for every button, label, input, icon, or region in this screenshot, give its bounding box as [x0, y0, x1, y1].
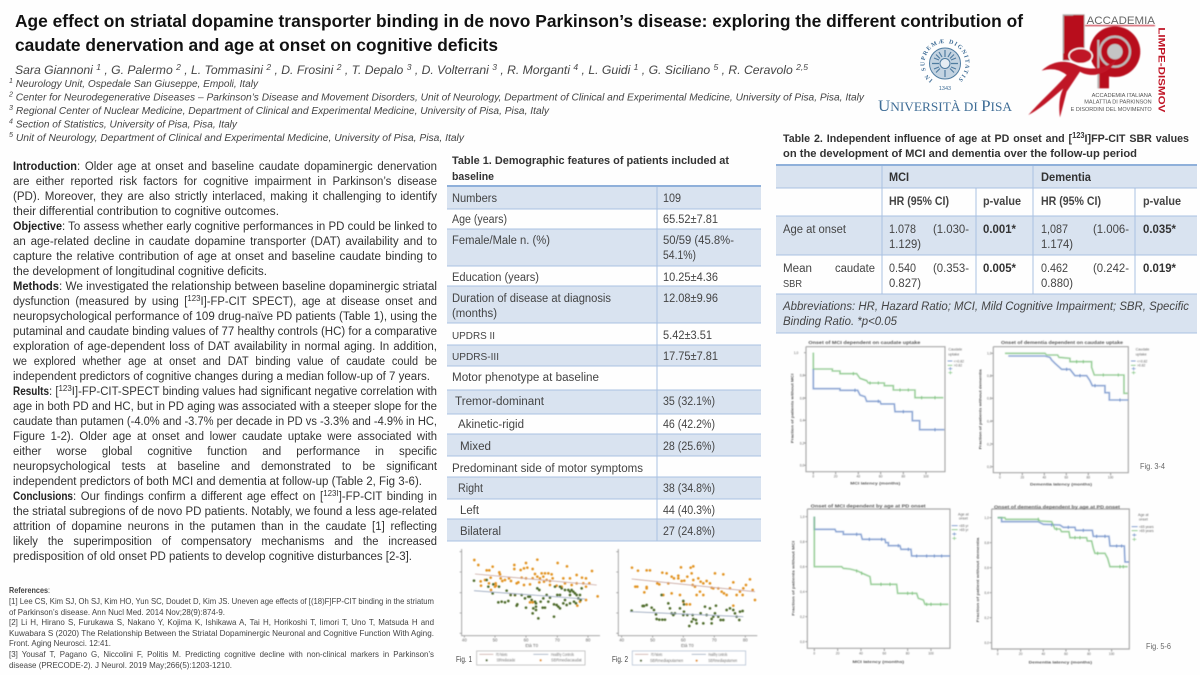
axis labels: 0,8 [800, 540, 805, 544]
legend: Healthy Controls [551, 652, 574, 657]
logo: Università di Pisa [878, 39, 1012, 115]
axis labels: 0,2 [800, 615, 805, 619]
objective: : To assess whether early cognitive performances in PD could be linked to [62, 221, 437, 233]
table 1 labels: Left [460, 505, 480, 517]
table 2 row: age at onset: (1.006- [1093, 224, 1129, 236]
axis labels: 100 [923, 474, 929, 478]
label: Fig. 2: Fig. 2 [612, 654, 628, 664]
legend: SBRmediacaudat [497, 658, 515, 663]
axis labels: 100 [1108, 475, 1114, 479]
axis labels: MCI latency (months) [852, 659, 905, 664]
figure 2: putamen scatter plot [616, 549, 757, 665]
results: either worse global cognitive function and performance in specific [13, 446, 437, 458]
axis labels: 0,4 [800, 590, 805, 594]
table 2 row: mean caudate SBR: caudate [835, 263, 875, 275]
table 1 labels: Right [458, 483, 484, 495]
blue curve [814, 517, 950, 558]
references: References: [9, 585, 50, 595]
legend: >0.82 [1137, 364, 1146, 368]
axis labels: 0,0 [800, 640, 805, 644]
axis labels: 80 [906, 651, 910, 655]
table 2 headers: HR (95% CI) [1041, 196, 1101, 208]
axis labels: 1,0 [987, 352, 992, 356]
table 1 labels: (months) [452, 308, 497, 320]
objective [13, 221, 437, 278]
methods: putaminal and caudate binding values of 77 healthy controls (HC) for a comparative [13, 326, 437, 338]
green curve [998, 518, 1128, 568]
table 2 row: mean caudate SBR: Mean [783, 263, 812, 275]
legend: PD Patients [496, 652, 507, 657]
axis labels: 20 [834, 474, 838, 478]
axis labels: 100 [928, 651, 934, 655]
axis labels: 60 [1064, 475, 1068, 479]
references: of Parkinson’s disease. Ann Nucl Med. 2014 Nov;28(9):874-9. [9, 607, 225, 617]
table 2 row: mean caudate SBR: 0.827) [889, 278, 921, 290]
chart frame [804, 347, 945, 474]
affiliations: 3 Regional Center of Nuclear Medicine, Department of Clinical and Experimental Medicine, University of Pisa, Pisa, Italy [9, 105, 550, 117]
label: Fig. 1: Fig. 1 [456, 654, 472, 664]
table 2 row: age at onset [783, 224, 1177, 251]
methods: we explored whether age at onset and DAT binding value of caudate could be [12, 356, 437, 368]
conclusions: likely the superimposition of compensatory mechanisms and the increased [13, 536, 437, 548]
legend [477, 651, 585, 665]
table 1 labels: Female/Male n. (%) [452, 235, 550, 247]
chart: MCI by caudate uptake [791, 340, 964, 486]
table 2 row: mean caudate SBR: (0.353- [933, 263, 969, 275]
axis labels: 0,6 [800, 396, 804, 400]
table 2 headers: MCI [889, 172, 909, 184]
trend lines [632, 579, 755, 592]
table 2 headers: HR (95% CI) [889, 196, 949, 208]
axis labels: 0,2 [800, 441, 804, 445]
axis labels [979, 352, 1114, 487]
axis labels: 80 [1086, 475, 1090, 479]
axis labels: 0,4 [800, 419, 804, 423]
axis labels: 40 [1041, 652, 1045, 656]
table 2 headers [889, 172, 1181, 208]
legend: >65 years [1139, 529, 1154, 533]
table 1 values: 109 [663, 193, 681, 205]
chart frame [805, 509, 950, 651]
axis labels: 80 [901, 474, 905, 478]
legend: SBRmediaputamen [708, 658, 738, 663]
introduction: their differential contribution to cognitive outcomes. [13, 206, 279, 218]
chart frame [990, 509, 1129, 652]
green points [632, 595, 743, 626]
table 1 values: 12.08±9.96 [663, 293, 718, 305]
axis labels: 0,0 [800, 464, 804, 468]
legend: >0.82 [954, 364, 962, 368]
table 1 values: 38 (34.8%) [663, 483, 715, 495]
methods: : We investigated the relationship between baseline dopaminergic striatal [59, 281, 437, 293]
axis labels: 80 [1087, 652, 1091, 656]
axis labels: 0 [999, 475, 1001, 479]
table 1 labels: Motor phenotype at baseline [452, 372, 599, 384]
axis labels [791, 351, 929, 486]
axis labels: 40 [619, 638, 625, 643]
references [9, 585, 434, 670]
table 2 row: age at onset: 1.129) [889, 239, 921, 251]
axis labels: 60 [524, 638, 529, 643]
survival bands [814, 517, 950, 604]
axis labels: 0,8 [984, 541, 989, 545]
logo mark [1028, 15, 1155, 117]
legend: onset [959, 517, 968, 521]
table 1 labels: Numbers [452, 193, 497, 205]
conclusions: attrition of dopamine neurons in the putamen than in the caudate [1] reflecting [13, 521, 437, 533]
methods: neuropsychological performance of 109 drug-naïve PD patients (Table 1), using the [13, 311, 437, 323]
table 2 abbreviations: Binding Ratio. *p<0.05 [783, 316, 898, 328]
chart: dementia by age at onset [975, 504, 1154, 665]
methods: dysfunction (measured by using [123I]-FP-CIT SPECT), age at disease onset and [13, 294, 437, 308]
panel: abstract text [12, 161, 438, 563]
axis labels: 20 [1020, 475, 1024, 479]
table 1 labels: Age (years) [452, 214, 507, 226]
table 2 row: mean caudate SBR: 0.019* [1143, 263, 1177, 275]
table 2 abbreviations: Abbreviations: HR, Hazard Ratio; MCI, Mild Cognitive Impairment; SBR, Specific [782, 301, 1189, 313]
axis labels: 0,8 [987, 374, 992, 378]
axis labels: Età T0 [681, 643, 694, 648]
icon: Pisa university seal: 1343 [939, 86, 951, 92]
legend: SBRmediaputamen [650, 658, 684, 663]
axis labels: Fraction of patient without dementia [975, 537, 980, 622]
objective: the development of longitudinal cognitive deficits. [13, 266, 267, 278]
figure 1: caudate scatter plot [460, 549, 600, 665]
axis labels: 0,6 [987, 397, 992, 401]
axis labels: Fraction of patients without MCI [791, 374, 795, 443]
axis labels: 40 [856, 474, 860, 478]
axis labels: 0 [997, 652, 999, 656]
legend [632, 651, 746, 665]
axis labels: 0,2 [984, 616, 989, 620]
axis labels: 60 [882, 651, 886, 655]
table 1: demographic features [447, 186, 761, 541]
table 1 labels: Tremor-dominant [455, 396, 545, 408]
methods: exploration of age-dependent loss of DAT availability in normal aging. In addition, [13, 341, 437, 353]
axis labels: Dementia latency (months) [1030, 483, 1093, 487]
affiliations [8, 78, 865, 144]
logo: Accademia LIMPE-DISMOV: ACCADEMIA ITALIANA [1092, 93, 1152, 99]
title: caudate denervation and age at onset on cognitive deficits [15, 35, 498, 55]
references: Kuwabara S (2020) The Relationship Between the Striatal Dopaminergic Neuronal and Cognitive Function With Aging. [9, 628, 434, 638]
table 1 labels: Duration of disease at diagnosis [452, 293, 611, 305]
axis labels: 0,0 [987, 465, 992, 469]
axis labels: 40 [859, 651, 863, 655]
affiliations: 5 Unit of Neurology, Department of Clinical and Experimental Medicine, University of Pisa, Pisa, Italy [9, 132, 465, 144]
axis labels: 0,6 [984, 566, 989, 570]
methods: Methods [13, 281, 59, 293]
axis labels: 0 [812, 474, 814, 478]
chart title: Onset of dementia dependent on caudate uptake [1001, 340, 1124, 345]
results: neuropsychological tests at baseline and demonstrated to be significant [13, 461, 438, 473]
results: caudate than putamen (-4.0% and -3.7% per decade in PD vs -3.3% and -4.9% in HC, [13, 416, 437, 428]
green curve [1005, 353, 1128, 393]
trend lines [475, 574, 597, 585]
table 2 heading: on the development of MCI and dementia over the follow-up period [783, 148, 1137, 160]
axis labels: 60 [1064, 652, 1068, 656]
axis labels: Dementia latency (months) [1029, 660, 1093, 665]
table 2 row: mean caudate SBR: 0.005* [983, 263, 1017, 275]
table 1 values: 46 (42.2%) [663, 419, 715, 431]
legend: <=0.82 [1137, 359, 1147, 363]
table 1 values [663, 193, 734, 538]
axis labels [791, 515, 934, 664]
logo text: ACCADEMIA [1087, 15, 1156, 27]
table 1 labels: UPDRS II [452, 331, 495, 342]
legend: onset [1139, 517, 1148, 521]
axis labels [462, 638, 591, 648]
axis labels: Età T0 [525, 643, 539, 648]
objective: an age-related decline in caudate dopamine transporter (DAT) availability and to [13, 236, 437, 248]
legend: Age at [1138, 513, 1149, 517]
axis labels: 40 [1042, 475, 1046, 479]
table 2 row: mean caudate SBR: 0.540 [889, 263, 916, 275]
legend: <65 yr [959, 524, 969, 528]
axis labels: 0,6 [800, 565, 805, 569]
references: [1] Lee CS, Kim SJ, Oh SJ, Kim HO, Yun SC, Doudet D, Kim JS. Uneven age effects of [(18)F]FP-CIT binding in the striatum [9, 596, 434, 606]
axis labels: 60 [879, 474, 883, 478]
conclusions: : Our findings confirm a different age effect on [123I]-FP-CIT binding in [73, 489, 437, 503]
survival bands [813, 353, 944, 430]
logo: Accademia LIMPE-DISMOV: E DISORDINI DEL MOVIMENTO [1071, 107, 1152, 113]
legend [952, 512, 969, 540]
axis labels: 80 [743, 638, 748, 643]
axis labels: 1,0 [794, 351, 798, 355]
chart title: Onset of MCI dependent on caudate uptake [808, 340, 921, 345]
table 1 values: 35 (32.1%) [663, 396, 715, 408]
blue curve [998, 518, 1129, 562]
title: Age effect on striatal dopamine transporter binding in de novo Parkinson’s disease: exploring the different contribution of [15, 11, 1023, 31]
table 2 row: age at onset: 0.001* [983, 224, 1017, 236]
axis labels: 60 [681, 638, 686, 643]
table 1 values: 5.42±3.51 [663, 330, 712, 342]
legend: uptake [948, 352, 959, 356]
table 2 headers: Dementia [1041, 172, 1092, 184]
table 2: independent influence [776, 165, 1197, 333]
axis labels: 70 [555, 638, 560, 643]
table 1 values: 10.25±4.36 [663, 272, 718, 284]
axis labels: 0 [813, 651, 815, 655]
table 1 values: 65.52±7.81 [663, 214, 718, 226]
table 1 values: 50/59 (45.8%- [663, 235, 734, 247]
orange points [474, 560, 598, 606]
green curve [814, 517, 948, 606]
table 2 row: age at onset: Age at onset [783, 224, 847, 236]
table 1 heading [452, 155, 729, 183]
axis labels: 0,8 [800, 374, 804, 378]
methods [12, 281, 437, 383]
table 1 values: 27 (24.8%) [663, 526, 715, 538]
orange points [632, 566, 755, 606]
axis labels: 0,4 [984, 591, 989, 595]
logo wordmark: UNIVERSITÀ DI PISA [878, 98, 1012, 115]
table 1 labels: Education (years) [452, 272, 539, 284]
affiliations: 1 Neurology Unit, Ospedale San Giuseppe, Empoli, Italy [9, 78, 259, 90]
green points [474, 580, 582, 618]
objective: capture the relative contribution of age at onset and baseline caudate binding to [13, 251, 437, 263]
axis labels: 50 [650, 638, 656, 643]
legend: Healthy controls [708, 652, 727, 657]
green curve [813, 353, 943, 399]
legend: Caudate [1136, 348, 1149, 352]
axis labels: MCI latency (months) [850, 482, 901, 486]
objective: Objective [13, 221, 62, 233]
conclusions [13, 489, 437, 563]
table 2 heading: Table 2. Independent influence of age at PD onset and [123I]FP-CIT SBR values [783, 131, 1189, 145]
references: [3] Yousaf T, Pagano G, Niccolini F, Politis M. Predicting cognitive decline with non-clinical markers in Parkinson’s [9, 649, 434, 659]
icon: Pisa university seal: IN SUPREMÆ DIGNITATIS [920, 39, 970, 83]
results: : [123I]-FP-CIT-SPECT binding values had significant negative correlation with [49, 384, 437, 398]
table 1 labels: UPDRS-III [452, 352, 499, 363]
results [13, 384, 438, 488]
table 2 row: mean caudate SBR: (0.242- [1093, 263, 1129, 275]
logo: Accademia LIMPE-DISMOV: MALATTIA DI PARKINSON [1084, 100, 1152, 106]
table 2 row: mean caudate SBR [783, 263, 1177, 290]
title [15, 11, 1023, 55]
survival bands [998, 518, 1129, 567]
table 2 row: age at onset: 1,087 [1041, 224, 1068, 236]
conclusions: the striatal subregions of de novo PD patients. Notably, we found a less age-related [13, 506, 437, 518]
legend: <=0.82 [954, 359, 964, 363]
axis labels: Fraction of patients without dementia [979, 368, 983, 449]
label: Fig. 3-4: Fig. 3-4 [1140, 461, 1165, 471]
chart: dementia by caudate uptake [979, 340, 1149, 487]
legend: >65 yr [959, 528, 969, 532]
survival bands [1005, 353, 1128, 400]
legend: uptake [1136, 352, 1147, 356]
introduction: (PD). Moreover, they are also strictly interlaced, making it challenging to identify [13, 191, 437, 203]
references: disease (PRECODE-2). J Neurol. 2019 May;266(5):1203-1210. [9, 660, 232, 670]
table 2 row: age at onset: 1.174) [1041, 239, 1073, 251]
table 1 labels: Bilateral [460, 526, 501, 538]
blue curve [813, 369, 944, 431]
conclusions: Conclusions [13, 491, 73, 503]
legend [1131, 348, 1149, 374]
table 2 row: age at onset: (1.030- [933, 224, 969, 236]
table 2 row: age at onset: 1.078 [889, 224, 916, 236]
axis labels: 100 [1109, 652, 1115, 656]
introduction: Introduction [13, 161, 77, 173]
conclusions: predisposition of old onset PD patients to develop cognitive disturbances [2-3]. [13, 551, 412, 563]
references: [2] Li H, Hirano S, Furukawa S, Nakano Y, Kojima K, Ishikawa A, Tai H, Horikoshi T, Iimori T, Uno T, Matsuda H and [9, 617, 434, 627]
introduction: are either reported risk factors for cognitive impairment in Parkinson’s disease [13, 176, 437, 188]
chart title: Onset of MCI dependent by age at PD onset [811, 504, 926, 509]
results: Figure 1-2). Older age at onset and lower caudate uptake were associated with [13, 431, 437, 443]
legend: Age at [958, 512, 969, 516]
table 2 headers: p-value [983, 196, 1021, 208]
table 1 values: 44 (40.3%) [663, 505, 715, 517]
table 2 row: mean caudate SBR: SBR [783, 279, 802, 290]
table 1 heading: Table 1. Demographic features of patients included at [452, 155, 729, 167]
axis labels: 0,4 [987, 419, 992, 423]
label: Fig. 5-6: Fig. 5-6 [1146, 641, 1171, 651]
axis labels: 0,0 [984, 641, 989, 645]
axis labels: 40 [462, 638, 467, 643]
logo: Accademia LIMPE-DISMOV [1028, 15, 1167, 117]
table 1 heading: baseline [452, 171, 494, 183]
table 1 labels [452, 193, 643, 538]
table 1 labels: Akinetic-rigid [458, 419, 524, 431]
methods: independent predictors of cognitive changes during a median follow-up of 7 years. [13, 371, 430, 383]
table 1 values: 17.75±7.81 [663, 351, 718, 363]
axis labels: 1,0 [800, 515, 805, 519]
legend [1132, 513, 1154, 541]
authors: Sara Giannoni 1 , G. Palermo 2 , L. Tommasini 2 , D. Frosini 2 , T. Depalo 3 , D. Volterrani 3 , R. Morganti 4 , L. Guidi 1 , G. Siciliano 5 , R. Ceravolo 2,5 [15, 62, 808, 77]
axis labels [619, 638, 748, 648]
table 1 labels: Mixed [460, 441, 491, 453]
legend: <65 years [1139, 525, 1154, 529]
affiliations: 2 Center for Neurodegenerative Diseases – Parkinson’s Disease and Movement Disorders, Unit of Neurology, Department of Clinical and Experimental Medicine, University of Pisa, Pisa, Italy [8, 92, 865, 104]
table 2 headers: p-value [1143, 196, 1181, 208]
axis labels: 50 [493, 638, 498, 643]
axis labels: 20 [836, 651, 840, 655]
axis labels: 70 [712, 638, 717, 643]
results: independent predictors of both MCI and dementia at follow-up (Table 2, Fig 3-6). [13, 476, 422, 488]
results: Results [13, 386, 49, 398]
axis labels: 20 [1019, 652, 1023, 656]
axis labels: 80 [586, 638, 591, 643]
axis labels: 0,2 [987, 442, 992, 446]
axis labels: 1,0 [984, 516, 989, 520]
table 2 abbreviations [782, 301, 1189, 328]
results: age in both PD and HC, but in PD aging was associated with a steeper slope for the [13, 401, 437, 413]
table 2 row: mean caudate SBR: 0.880) [1041, 278, 1073, 290]
blue curve [1008, 356, 1128, 402]
chart title: Onset of dementia dependent by age at PD onset [994, 504, 1120, 509]
table 2 heading [783, 131, 1189, 160]
affiliations: 4 Section of Statistics, University of Pisa, Pisa, Italy [9, 118, 238, 130]
introduction: : Older age at onset and baseline caudate dopaminergic denervation [77, 161, 437, 173]
table 2 row: mean caudate SBR: 0.462 [1041, 263, 1068, 275]
legend [948, 348, 964, 374]
chart: MCI by age at onset [791, 504, 969, 664]
chart frame [991, 347, 1128, 475]
table 2 row: age at onset: 0.035* [1143, 224, 1177, 236]
legend: Caudate [948, 348, 962, 352]
introduction [13, 161, 437, 218]
table 1 values: 54.1%) [663, 250, 696, 262]
references: Front. Aging Neurosci. 12:41. [9, 638, 111, 648]
table 1 labels: Predominant side of motor symptoms [452, 463, 643, 475]
table 1 values: 28 (25.6%) [663, 441, 715, 453]
logo: Accademia LIMPE-DISMOV: LIMPE-DISMOV [1157, 27, 1167, 113]
axis labels [975, 516, 1115, 665]
legend: PD Patients [651, 652, 662, 657]
axis labels: Fraction of patients without MCI [791, 541, 796, 616]
legend: SBRmediacaudat [551, 658, 582, 663]
